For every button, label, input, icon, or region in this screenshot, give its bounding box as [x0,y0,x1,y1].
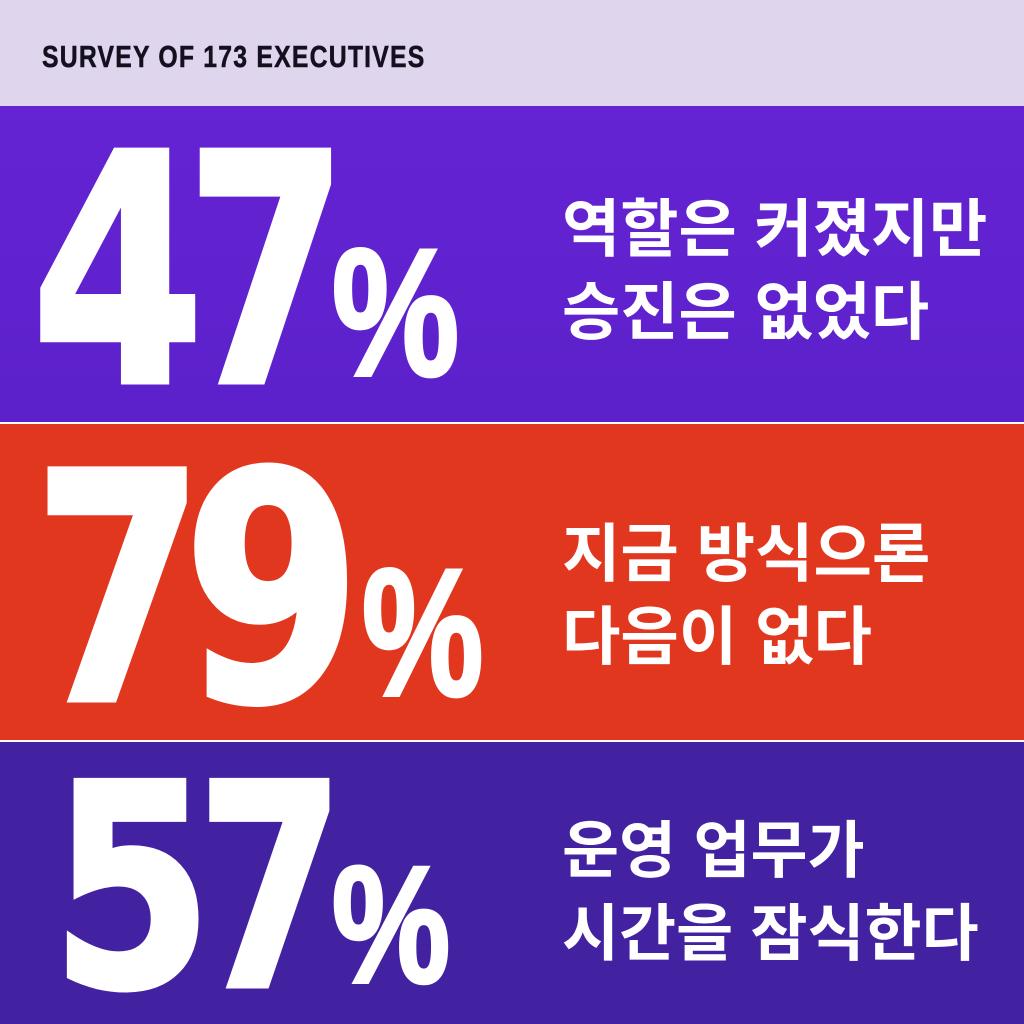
caption: 승진은 없었다 [562,262,929,353]
percent sign: % [362,532,483,734]
percent sign: % [332,212,459,414]
caption: 역할은 커졌지만 [562,179,987,270]
statistic 47 [31,87,347,457]
caption: 시간을 잠식한다 [562,883,979,973]
percent sign: % [332,833,450,1018]
caption [562,800,979,973]
caption: 운영 업무가 [562,800,865,890]
header title: SURVEY OF 173 EXECUTIVES [42,39,425,74]
statistic 47: 4 [31,87,205,457]
statistic 47: 7 [186,87,347,457]
caption: 지금 방식으론 [562,503,930,595]
panel: 57% [0,742,1024,1024]
statistic 79: 9 [183,406,361,775]
panel: 47% [0,106,1024,422]
panel: 79% [0,424,1024,740]
caption: 다음이 없다 [562,586,872,678]
caption [562,503,930,678]
caption [562,179,987,353]
statistic 79: 7 [33,406,204,775]
header band [0,0,1024,106]
statistic 57 [51,724,344,1024]
statistic 79 [33,406,361,775]
